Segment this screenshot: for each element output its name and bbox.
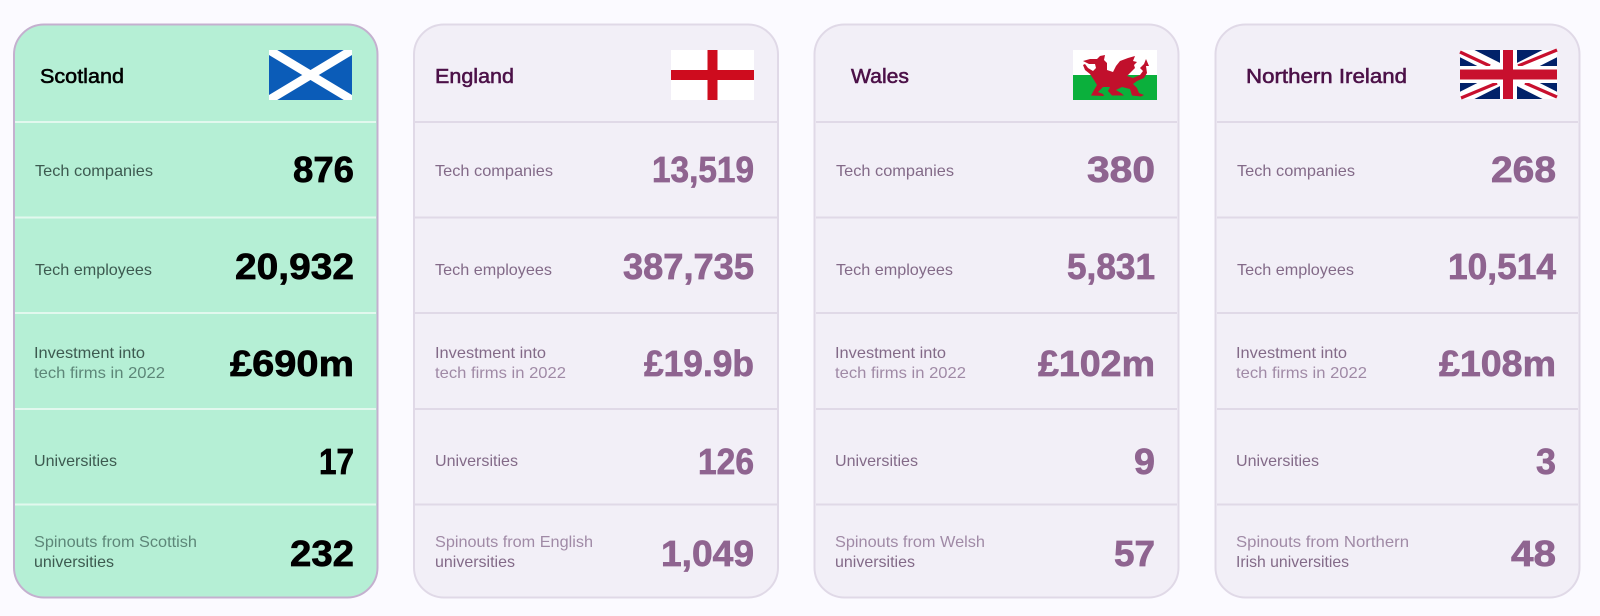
row: tech companies: Tech companies bbox=[1237, 163, 1355, 180]
row: tech employees bbox=[836, 246, 1155, 287]
icon: Union flag bbox=[1460, 50, 1557, 99]
row: spinouts bbox=[835, 533, 1155, 574]
row: universities: 9 bbox=[1134, 441, 1155, 482]
heading: England: England bbox=[435, 66, 514, 88]
row: universities: Universities bbox=[835, 453, 918, 470]
heading: Wales: Wales bbox=[851, 66, 909, 88]
row: tech companies: Tech companies bbox=[836, 163, 954, 180]
row: spinouts: 1,049 bbox=[661, 533, 754, 574]
row: investment: Investment into bbox=[435, 345, 546, 362]
row: tech employees bbox=[1237, 246, 1556, 287]
row: tech companies bbox=[836, 149, 1155, 190]
row: spinouts: Spinouts from Welsh bbox=[835, 534, 985, 551]
row: tech employees bbox=[435, 246, 754, 287]
row: universities: 126 bbox=[698, 441, 754, 482]
row: investment: £108m bbox=[1439, 343, 1556, 384]
row: tech employees: 5,831 bbox=[1067, 246, 1155, 287]
row: universities bbox=[835, 441, 1155, 482]
row: investment: Investment into bbox=[1236, 345, 1347, 362]
panel: Scotland bbox=[14, 24, 378, 598]
row: investment: £102m bbox=[1038, 343, 1155, 384]
icon: Welsh flag bbox=[1073, 50, 1157, 100]
row: spinouts: Irish universities bbox=[1236, 554, 1349, 571]
row: spinouts: 57 bbox=[1114, 533, 1155, 574]
panel: Wales bbox=[814, 24, 1178, 598]
heading: Northern Ireland: Northern Ireland bbox=[1246, 66, 1407, 88]
row: tech companies: 876 bbox=[293, 149, 354, 190]
row: tech employees: Tech employees bbox=[836, 262, 953, 279]
panel: Northern Ireland bbox=[1216, 24, 1580, 598]
row: universities bbox=[34, 441, 354, 482]
row: spinouts bbox=[34, 533, 354, 574]
row: investment: £690m bbox=[230, 343, 354, 384]
heading: Scotland: Scotland bbox=[40, 66, 124, 88]
row: universities: 3 bbox=[1536, 441, 1556, 482]
row: universities: Universities bbox=[1236, 453, 1319, 470]
row: universities bbox=[435, 441, 754, 482]
row: spinouts: Spinouts from Scottish bbox=[34, 534, 197, 551]
row: investment bbox=[435, 343, 754, 384]
row: spinouts: universities bbox=[34, 554, 114, 571]
icon: English flag bbox=[671, 50, 754, 100]
row: tech employees: 20,932 bbox=[235, 246, 354, 287]
row: tech companies: 380 bbox=[1087, 149, 1155, 190]
row: spinouts bbox=[435, 533, 754, 574]
row: universities: Universities bbox=[34, 453, 117, 470]
row: investment bbox=[34, 343, 354, 384]
row: investment bbox=[835, 343, 1155, 384]
row: spinouts: universities bbox=[835, 554, 915, 571]
row: spinouts: universities bbox=[435, 554, 515, 571]
row: tech companies bbox=[435, 149, 754, 190]
row: tech employees: Tech employees bbox=[435, 262, 552, 279]
icon: Scottish flag bbox=[269, 50, 352, 100]
row: spinouts bbox=[1236, 533, 1556, 574]
row: investment: tech firms in 2022 bbox=[34, 365, 165, 382]
row: tech employees: 387,735 bbox=[623, 246, 754, 287]
row: investment: tech firms in 2022 bbox=[835, 365, 966, 382]
row: spinouts: 232 bbox=[290, 533, 354, 574]
row: universities: 17 bbox=[319, 441, 354, 482]
row: spinouts: Spinouts from English bbox=[435, 534, 593, 551]
row: tech companies: Tech companies bbox=[35, 163, 153, 180]
row: tech employees bbox=[35, 246, 354, 287]
row: spinouts: Spinouts from Northern bbox=[1236, 534, 1409, 551]
row: investment: Investment into bbox=[34, 345, 145, 362]
row: tech companies: Tech companies bbox=[435, 163, 553, 180]
row: tech companies bbox=[1237, 149, 1556, 190]
row: investment: Investment into bbox=[835, 345, 946, 362]
row: tech companies bbox=[35, 149, 354, 190]
row: tech companies: 268 bbox=[1491, 149, 1556, 190]
row: tech employees: Tech employees bbox=[1237, 262, 1354, 279]
row: investment: tech firms in 2022 bbox=[1236, 365, 1367, 382]
row: tech companies: 13,519 bbox=[652, 149, 754, 190]
row: tech employees: Tech employees bbox=[35, 262, 152, 279]
row: universities: Universities bbox=[435, 453, 518, 470]
row: investment bbox=[1236, 343, 1556, 384]
row: tech employees: 10,514 bbox=[1448, 246, 1556, 287]
row: spinouts: 48 bbox=[1511, 533, 1556, 574]
row: universities bbox=[1236, 441, 1556, 482]
row: investment: £19.9b bbox=[644, 343, 754, 384]
panel: England bbox=[414, 24, 778, 598]
row: investment: tech firms in 2022 bbox=[435, 365, 566, 382]
